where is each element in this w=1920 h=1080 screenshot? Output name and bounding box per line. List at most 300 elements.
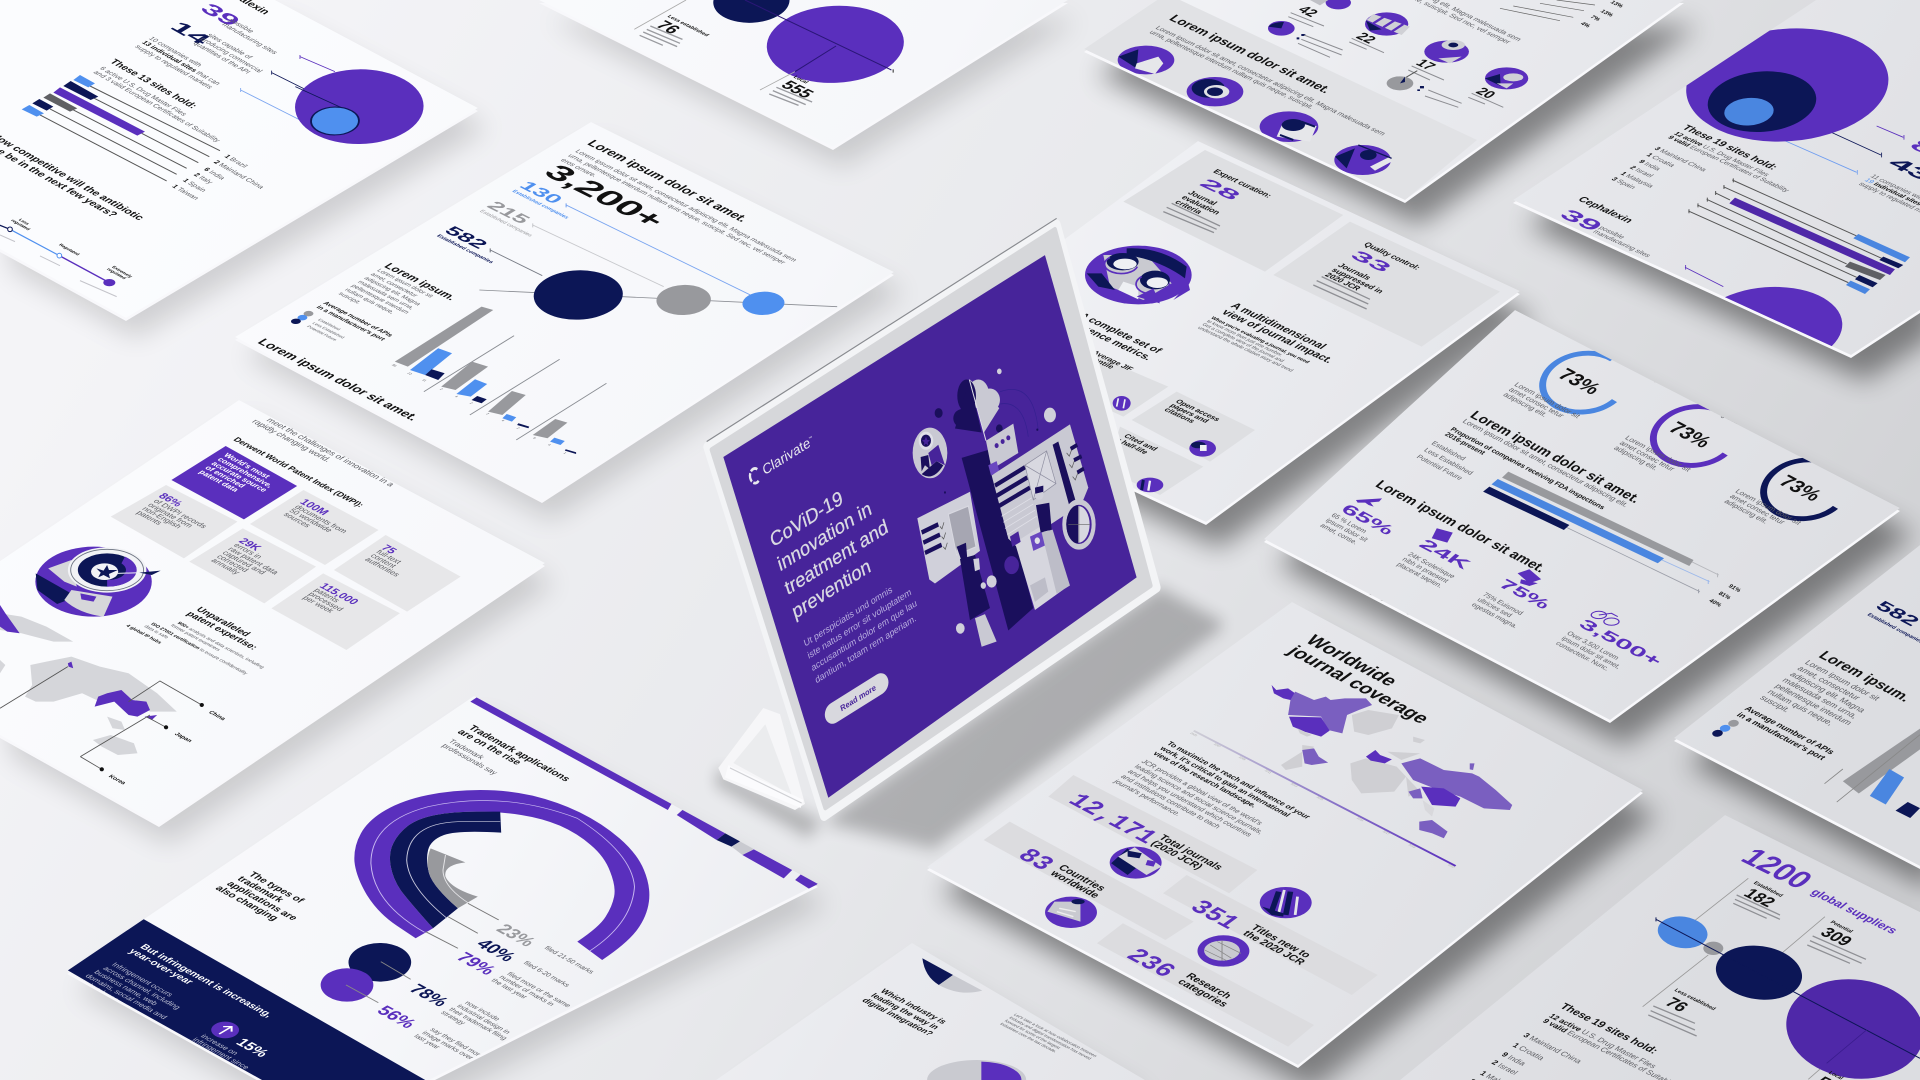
tablet body [707,218,1157,816]
stat: 75 [334,535,461,612]
heading: Lorem ipsum dolor sit amet. [1166,12,1335,95]
chart: navy 73% ring: adipiscing elit. [1722,497,1771,525]
stat: 29K: raw patent data [226,546,281,576]
list: countries: 3 Mainland China [1521,1032,1584,1065]
panel: 73% statistics sheet: Proportion of companies receiving FDA inspections [1448,427,1606,511]
text block: body: leading science and social science journals, [1132,763,1266,836]
stat panel: 83: 83 [1010,844,1060,875]
panel: average JIF: percentile [1077,350,1117,370]
stat panel: 236: Research [1183,972,1233,1001]
title: innovation in [775,497,874,576]
tablet screen [723,255,1137,798]
stat: 24K: 24K [1415,537,1474,573]
text block: Get a complete view of the journal and [1200,322,1285,364]
icon: small pie [1268,21,1295,36]
stat: 79%: 79% [452,949,500,978]
panel: Cephalexin sites sheet (top left): These 13 sites hold: [107,58,199,110]
text block: expertise: former patent examiners [169,623,222,653]
stat: 75: authorities [363,556,402,578]
panel: quality control: Journals [1336,262,1374,282]
chart: nested circles [1644,6,1920,175]
heading: leading the way in [869,992,942,1031]
chart: timeline: 2018 [1408,843,1417,849]
stat: 24K: nibh in praesent [1400,557,1450,584]
stat: established 182: 182 [1740,885,1780,910]
stat: 3,200+: 3,200+ [536,161,673,232]
panel: Cephalexin sites sheet (top left): 39 [195,1,245,30]
stat: less established 76: Less established [1672,988,1717,1012]
icon: globe [1197,935,1249,967]
stat: 79%: filed more or the same [505,972,572,1009]
legend: Established [1429,441,1467,462]
chart: regulation slider: regulated [10,219,32,231]
stat: 86%: originate from [146,502,195,529]
callout: infringement band: marketplaces [74,976,122,1003]
panel: open access: Open access [1173,398,1223,423]
bar chart: 11 [421,378,428,382]
illustration: people and research [913,369,1096,647]
text block: When you're evaluating a journal, you need [1209,316,1311,365]
list: countries: 2 Israel [1489,1059,1520,1076]
stat: 65%: amet, conse. [1318,523,1359,546]
list: countries: 1 Croatia [1510,1042,1547,1062]
panel: 582 sheet (right edge): pellentesque interdum [1773,682,1855,727]
world map with hubs [0,605,227,786]
stat: 79%: number of marks in [497,975,555,1007]
person: woman [956,543,997,647]
tablet shadow [713,588,1227,849]
tower [962,449,1033,630]
panel: Cephalexin 19 sites sheet (top right): 43 [1882,155,1920,184]
panel: 582 sheet (right edge): malesuada sem urna, [1780,676,1860,720]
stat: 42: 42 [1295,3,1322,19]
stat: 100M [250,490,379,565]
heading: are on the rise [454,728,524,767]
stat: 78%: now include [463,1001,501,1022]
stat: local [1812,1071,1852,1080]
heading: digital integration? [860,996,936,1037]
panel: 582 sheet (right edge): in a manufacturer's port [1735,711,1828,762]
panel: Cephalexin 19 sites sheet (top right): 12 active U.S. Drug Master Files [1672,131,1770,178]
panel: trademark applications sheet: Trademark [446,738,487,761]
bar chart: 2 [439,388,444,391]
panel: Cephalexin sites sheet (top left): 2 Mainland China [212,160,265,190]
text block: body: journal's performance. [1111,777,1183,817]
icon: gray pie [1387,76,1413,90]
stat: 86%: non-English [140,505,184,530]
list: countries [1467,1032,1584,1080]
stat panel: 12,171: (2020 JCR) [1148,839,1205,871]
callout: infringement band: year-over-year [126,947,195,986]
title: CoViD-19 [768,487,845,552]
heading: patent expertise: patent expertise: [184,610,260,652]
text block: body: accusantium dolor em que lau [810,598,918,673]
chart: leader lines and nested circles [240,55,424,144]
bar chart: FDA inspections [1483,472,1742,609]
panel: Cephalexin sites sheet (top left): 13 individual sites that can [140,40,221,86]
callout: purple box: patent data [197,469,241,493]
chart: horizontal bars [1688,178,1910,294]
stat: 56% [373,1003,491,1071]
stat: 130: Established companies [510,189,570,220]
stat: 100M: documents from [293,503,349,535]
stat: 75%: egestas magna. [1470,602,1519,630]
stat: 100M: sources [281,511,313,529]
panel: quality control: suppressed in [1329,267,1386,295]
heading: third: Lorem ipsum dolor sit amet. [1372,477,1550,575]
text block: body: dantium, totam rem aperiam. [814,613,917,685]
chart: regulation slider: Extremely [111,265,134,279]
callout: purple box [171,446,297,519]
browser panel [992,424,1088,547]
panel: 3,200+ companies sheet: adipiscing elit. Magna [362,276,423,307]
stat: potential 309 [1807,920,1866,963]
panel: Cephalexin sites sheet (top left): quantities of the API [191,41,251,75]
panel: 1200 global suppliers sheet: 12 active U.S. Drug Master Files [1547,1012,1658,1070]
bar chart: FDA inspections: 91% [1727,584,1742,594]
bar chart: 2 [515,427,521,430]
stat: 22 [1349,30,1384,53]
stat panel: 83: worldwide [1046,869,1102,900]
icon: checklist [1045,897,1097,928]
panel: Cephalexin sites sheet (top left): 2 Italy [192,172,214,185]
heading: multidimensional view: A multidimensional [1228,301,1329,351]
legend [1710,718,1741,738]
text block: body: iste natus error sit voluptatem [806,586,913,661]
panel: cited half-life: citing half-life [1099,430,1150,456]
stat: 65%: 65% [1337,502,1397,538]
world map with hubs: Korea [107,774,127,786]
panel: open access: papers and [1168,402,1212,424]
stat: 24K [1395,528,1474,590]
icon: target [1424,40,1469,63]
panel: 582 sheet (right edge): Lorem ipsum. [1815,649,1915,705]
text block: intro bold: To maximize the reach and influence of your [1165,740,1313,820]
chart: circles [321,943,411,1003]
chart: purple 73% ring: amet consec tetur [1617,439,1677,473]
panel: Cephalexin sites sheet (top left): producing commercial [198,37,264,74]
chart: percentages: 13% [1608,0,1625,9]
text block: expertise: ISO 27001 certification to ensure confidentiality [149,622,249,676]
heading: Lorem ipsum dolor sit amet. [1580,325,1758,422]
stat: 56%: say they filed more [428,1027,485,1059]
stat: 40% [472,936,571,988]
logo: Clarivate: ™ [808,434,813,441]
panel: trademark applications sheet [66,695,820,1080]
stat: 130: 130 [515,179,567,206]
panel: worldwide journal coverage sheet [927,602,1643,1065]
panel: 1200 global suppliers sheet [1400,815,1920,1080]
chart: purple 73% ring: 73% [1664,419,1716,452]
panel: Cephalexin sites sheet (top left): supply to regulated markets [133,44,214,90]
chart: supplier circles [1643,878,1920,1080]
panel: expert curation: 28 [1195,176,1245,203]
callout: purple box: comprehensive, [215,456,275,489]
bar chart: 2 [469,402,474,405]
text block: body: and helps you understand which countries [1125,768,1255,838]
text block: industry and digital transformation has moved [1008,1016,1093,1061]
panel: cited half-life [1099,425,1203,495]
chart: timeline: 2007 [1213,743,1222,748]
stat: 3,500+: 3,500+ [1575,617,1665,669]
icon: graduate [1334,145,1392,175]
stat: 17: 17 [1413,56,1440,72]
icon: journals [1110,847,1162,879]
list: countries [1609,146,1708,190]
bar chart [390,307,606,455]
chart: timeline: 2005 [1189,732,1199,737]
chart: percentages: 4% [1578,22,1592,29]
list: countries: 9 India [1499,1051,1528,1068]
chart: lower circle [1664,265,1873,386]
stat: 65%: ipsum dolor sit [1324,518,1369,543]
icon: upper pie [922,958,982,993]
callout: purple box: World's most [222,452,273,480]
panel: 3,200+ companies sheet: nullam quis neque, [343,287,396,315]
icon: eye [1187,77,1243,106]
stat: 115,000: per week [301,594,336,614]
icon: cloud [953,380,1038,441]
stat panel: 351: 351 [1183,896,1246,934]
person: man [1035,486,1070,594]
stat: 75: 75 [378,543,399,556]
panel: quality control: 2020 JCR [1323,271,1363,292]
chart: blue 73% ring: amet consec tetur [1507,386,1567,420]
panel: expert curation [1123,150,1343,272]
list: countries: 9 India [1637,159,1662,172]
chart: regulation slider: Less [17,218,31,226]
chart: navy 73% ring [1722,448,1864,537]
panel: Cephalexin 19 sites sheet (top right): manufacturing sites [1591,229,1652,259]
panel: 582 sheet (right edge) [1674,545,1920,866]
panel: 3,200+ companies sheet: Lorem ipsum dolor sit [375,268,435,299]
legend: Potential Future [1415,454,1464,482]
stat: 75%: 75% Euismod [1481,592,1524,617]
list: countries: 3 Mainland China [1652,146,1708,173]
stat: established 182 [1733,881,1784,919]
stat: 29K: 29K [236,537,264,553]
icon: awning [1365,12,1410,36]
stat panel: 236 [1097,923,1314,1047]
stat: 100M: 50 worldwide [287,507,335,534]
panel: 582 sheet (right edge): suscipit. [1758,694,1793,714]
stat: 86%: patents [134,509,164,526]
stat: 29K: errors in [232,542,264,560]
stat: 75%: ultricies sed [1475,597,1513,619]
panel: 1200 global suppliers sheet: 1200 [1734,844,1819,894]
panel: Cephalexin sites sheet (top left): 10 companies with [147,36,203,68]
heading: types: The types of [246,871,307,905]
callout: infringement band: across channel, including [101,965,183,1011]
panel: Derwent patent index sheet [0,400,545,824]
chart: linked circles [479,203,837,330]
logo: Clarivate: Clarivate [760,434,812,478]
stat: 40%: 40% [472,936,520,964]
stat: 115,000: patents [312,587,342,604]
panel: 73% statistics sheet [1264,310,1900,720]
icon: purple badge top [1310,0,1351,9]
text block: intro: meet the challenges of innovation in a [264,416,397,488]
stat: 65% [1318,498,1397,548]
heading: complete set: A complete set of [1076,311,1165,355]
stat: 115,000 [271,573,400,650]
stat: 24K: 24K Scelerisque [1406,552,1456,580]
stat: 78%: 78% [405,981,453,1009]
panel: quality control: Quality control: [1362,241,1422,271]
panel: Cephalexin sites sheet (top left): 6 India [202,167,226,181]
chart: purple 73% ring: Lorem ipsum dolor sit [1623,434,1694,474]
stat: 22: 22 [1353,30,1380,46]
chart: timeline: 2011 [1264,769,1273,774]
text block: forward for some of the largest [1003,1019,1062,1050]
panel: 73% statistics sheet: 2016-present [1443,432,1487,457]
heading: types: applications are [224,880,300,923]
chart: blue 73% ring [1501,342,1643,430]
stat panel: 83: Countries [1055,864,1108,893]
panel: average JIF: Average JIF [1090,349,1136,373]
chart: supplier circles [634,0,904,90]
chart: horizontal bars by country [22,75,220,181]
panel: Cephalexin sites sheet (top left): possible [227,18,255,34]
panel: expert curation: evaluation [1179,194,1222,216]
chart: navy 73% ring: amet consec tetur [1728,492,1788,526]
stat: 29K: corrected [215,553,251,573]
panel: Cephalexin 19 sites sheet (top right): possible [1597,226,1626,240]
chart: timeline: 2016 [1356,817,1365,822]
panel: 3,200+ companies sheet: pellentesque interdum [349,284,411,315]
panel: quality control: 33 [1346,248,1396,275]
stat: 3,500+: consectetur. Nunc. [1554,641,1610,672]
stat: less established 76 [1648,988,1717,1036]
legend: Less Established [1422,447,1474,477]
text block: to know more than just one number. [1205,319,1284,358]
panel: open access: citations [1162,406,1197,425]
decorative top bar [470,695,820,890]
callout: infringement band: infringement since [190,1036,252,1071]
panel: 3,200+ companies sheet: in a manufacturer's port [314,305,387,342]
chart: navy 73% ring: Lorem ipsum dolor sit [1733,487,1804,527]
panel: Cephalexin sites sheet (top left): sites capable of [205,33,253,60]
tablet stand [718,708,805,810]
icon: globe [1062,499,1096,550]
panel: Cephalexin 19 sites sheet (top right): Cephalexin [1575,196,1635,225]
text block: body: and institutions contribute to each [1119,773,1223,830]
chart: regulation slider [0,216,134,297]
icon: checklist [1260,111,1318,142]
stat: 56%: last year [412,1034,442,1051]
legend: Potential Future [306,325,339,342]
chart: purple 73% ring: adipiscing elit. [1612,444,1660,472]
panel: open access [1132,392,1255,462]
lower building [1010,522,1063,610]
panel: cited half-life: Cited and [1122,432,1160,452]
panel: Cephalexin sites sheet (top left) [0,0,478,318]
bar chart: 30 [390,363,397,367]
panel: 1200 global suppliers sheet: These 19 sites hold: [1557,1002,1660,1056]
bar chart: FDA inspections: 81% [1716,591,1732,601]
stat panel: 351: Titles new to [1248,924,1313,960]
stat: local 555 [769,75,818,105]
panel: expert curation: Expert curation: [1211,168,1274,199]
stat: 29K: annually [209,557,242,576]
heading: second: Lorem ipsum dolor sit amet. [1467,408,1645,505]
title: treatment and [782,515,891,600]
stat: 23%: filed 21-50 marks [542,946,596,975]
title: journal coverage [1282,643,1434,727]
panel: 582 sheet (right edge): 582 [1871,598,1920,629]
panel: average JIF [1077,346,1168,417]
callout: infringement band: 2019 [182,1040,204,1053]
stat: potential 309: Potential [1828,920,1854,934]
bar chart: 22 [406,372,413,376]
stat panel: 351 [1163,875,1378,995]
stat: 20 [1468,85,1503,107]
stat panel: 12,171 [1048,775,1257,893]
stat: 23% [492,921,596,975]
stat panel: 351: the 2020 JCR [1240,929,1307,967]
stat: 29K [189,528,316,603]
legend: Less Established [311,321,346,339]
text block: intro bold: work, it's critical to gain an international [1157,744,1293,818]
panel: 73% statistics sheet: Lorem ipsum dolor sit amet, consectetur adipiscing elit. [1572,334,1742,425]
stat: 582: 582 [440,224,492,251]
chart: timeline: 2013 [1290,782,1299,788]
text block: expertise: 900+ analysts and data scientists, including [175,621,265,670]
chart: timeline: 2020 [1447,863,1456,869]
heading: patent expertise: Unparalleled [193,605,253,639]
stat panel: 236: 236 [1119,944,1182,983]
panel: Cephalexin sites sheet (top left): and 3 valid European Certificates of Suitability [91,70,222,144]
chart: blue 73% ring: Lorem ipsum dolor sit [1512,381,1583,420]
list: countries: 2 Israel [1628,165,1655,179]
stat: 78%: industrial design in [455,1004,511,1035]
logo: Clarivate [750,432,815,483]
panel: 3,200+ companies sheet: malesuada sem urna, [356,280,416,311]
bar chart: 6 [532,437,537,440]
stat: 86%: 86% [155,492,185,509]
stat: 75%: 75% [1495,577,1553,612]
panel: Cephalexin 19 sites sheet (top right): 39 [1554,207,1607,235]
callout: infringement band: 15% [232,1036,272,1060]
panel: digital integration sheet (bottom centre) [716,943,1145,1080]
stat: less established 76: 76 [652,18,685,37]
chart: timeline: 2015 [1316,796,1325,801]
panel: 3,200+ companies sheet: amet, consectetur [368,272,419,298]
chart: percentages: 7% [1588,15,1602,22]
stat: 215: Established companies [478,209,534,238]
icon: book [1118,46,1174,74]
list: countries: 3 Spain [1609,177,1637,190]
text block: expertise: data is safe [142,624,170,640]
panel: 582 sheet (right edge): amet, consectetur [1795,664,1863,702]
stat: 3,500+: ipsum dolor sit amet, [1559,636,1622,670]
chart: radial arcs [354,790,649,960]
chart: percentages [1500,0,1625,29]
text block: urna, pellentesque interdum nullam quis neque, suscipit. [1147,29,1317,110]
panel: Cephalexin sites sheet (top left): 1 Spain [181,178,207,193]
chart: lower pie [927,1060,1026,1080]
stat: 78% [405,981,521,1045]
text block: expertise: 4 global IP hubs [124,624,163,645]
panel: Cephalexin 19 sites sheet (top right): 9 valid European Certificates of Suitability [1666,135,1790,193]
panel: expert curation: Journal [1186,189,1219,207]
list: countries: 1 Malaysia [1618,171,1655,189]
bar chart: 1 [562,452,567,455]
heading: types: trademark [234,875,286,904]
callout: infringement band: domains, social media and [83,972,169,1020]
stat: 100M: 100M [297,498,331,517]
text block: industries over the last decade. [999,1022,1058,1053]
